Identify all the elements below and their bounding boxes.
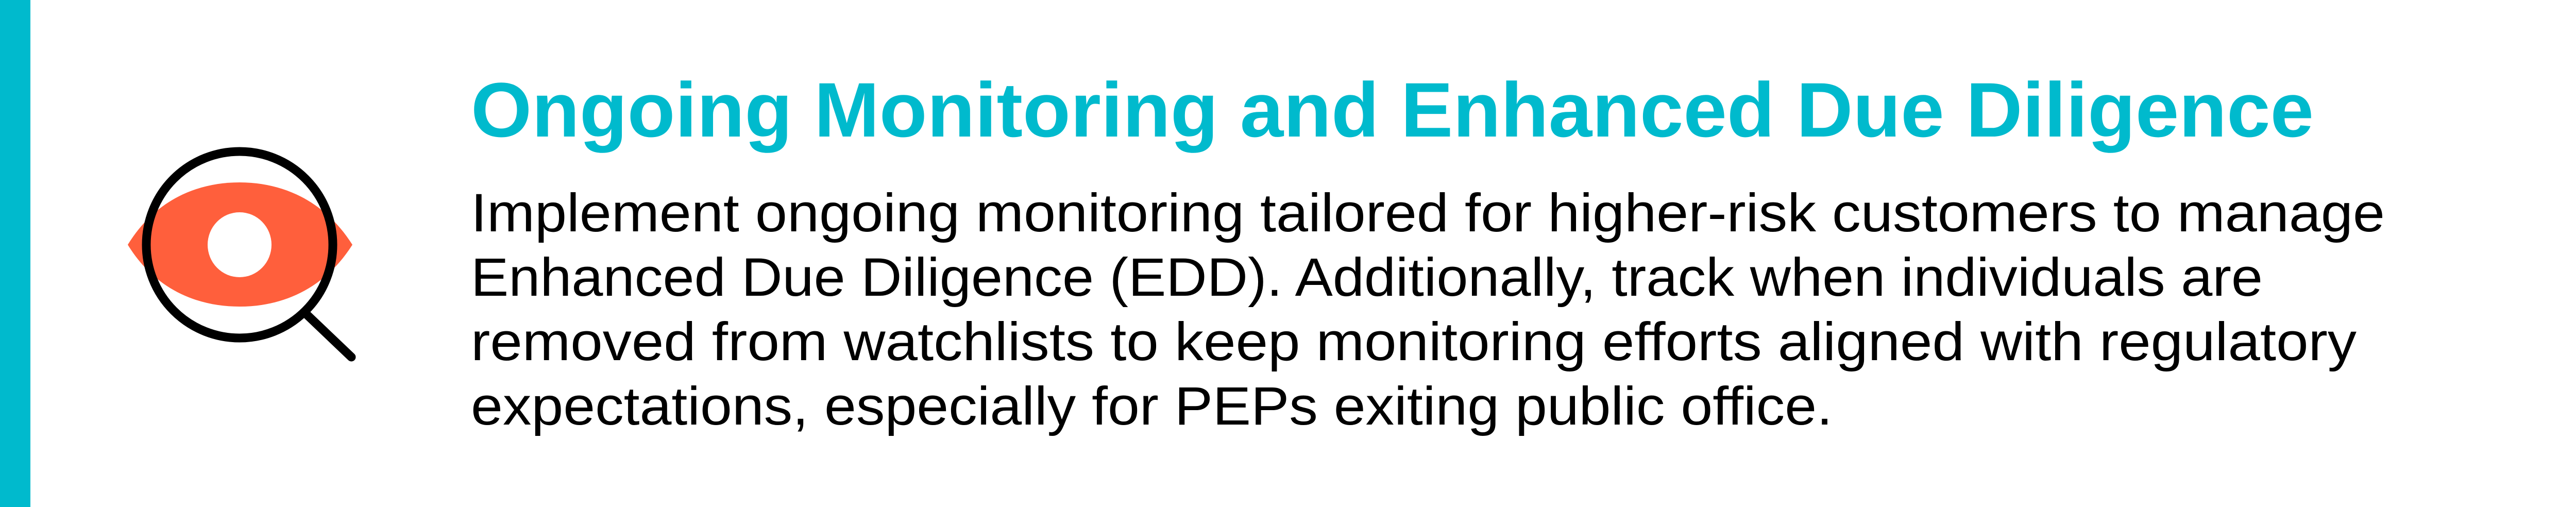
pupil bbox=[208, 212, 272, 277]
title: Ongoing Monitoring and Enhanced Due Diligence bbox=[471, 66, 2314, 153]
body text: removed from watchlists to keep monitoring efforts aligned with regulatory bbox=[471, 312, 2357, 372]
body text: expectations, especially for PEPs exiting public office. bbox=[471, 376, 1833, 436]
magnifier handle bbox=[308, 315, 351, 357]
body text: Enhanced Due Diligence (EDD). Additionally, track when individuals are bbox=[471, 247, 2263, 308]
magnifier lens bbox=[146, 151, 333, 338]
body text bbox=[471, 183, 2385, 436]
accent bar bbox=[0, 0, 30, 507]
eye shape bbox=[128, 182, 352, 307]
icon: eye with magnifying glass bbox=[128, 151, 352, 357]
body text: Implement ongoing monitoring tailored for higher-risk customers to manage bbox=[471, 183, 2385, 243]
